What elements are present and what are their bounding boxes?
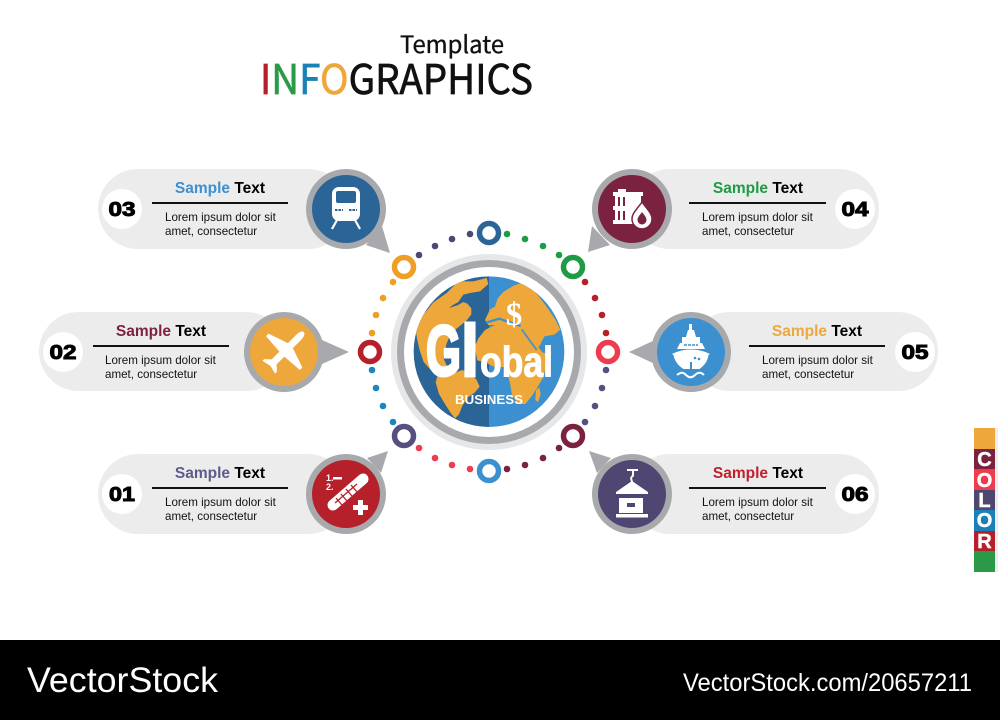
body text 03: Lorem ipsum dolor sit: [165, 211, 277, 224]
body text 06: Lorem ipsum dolor sit: [702, 496, 814, 509]
wordmark: Global: obal: [480, 338, 553, 386]
footer url: VectorStock.com/20657211: [683, 669, 972, 697]
strip letters: R: [977, 531, 992, 553]
wordmark: Global: l: [462, 312, 478, 392]
heading 01: Sample Text: [175, 465, 265, 482]
footer brand: VectorStock: [27, 661, 219, 700]
footer bar: [0, 640, 1000, 720]
body text 05: Lorem ipsum dolor sit: [762, 354, 874, 367]
body text 02: amet, consectetur: [105, 368, 197, 381]
icon: airplane: [252, 315, 321, 384]
orbit rings: [360, 224, 618, 480]
number 04: [835, 189, 875, 229]
strip letters: C: [977, 449, 992, 471]
number 05: [895, 332, 935, 372]
icon: train: [332, 187, 360, 229]
panel 05: [629, 312, 938, 392]
label: business: BUSINESS: [455, 392, 523, 407]
body text 03: amet, consectetur: [165, 225, 257, 238]
number 05: 05: [902, 341, 928, 364]
icon: ship: [672, 324, 710, 377]
title line: Template: Template: [400, 25, 504, 60]
centre globe emblem: [391, 254, 587, 450]
heading 06: Sample Text: [713, 465, 803, 482]
panel 02: [39, 312, 349, 392]
number 03: 03: [108, 198, 136, 221]
icon: thermometer: [326, 473, 368, 515]
dollar sign: $: [506, 297, 522, 333]
heading 04: Sample Text: [713, 180, 803, 197]
body text 01: Lorem ipsum dolor sit: [165, 496, 277, 509]
wordmark: Global: [426, 312, 553, 392]
icon: thermometer: 2.: [326, 482, 334, 492]
body text 01: amet, consectetur: [165, 510, 257, 523]
colour swatch strip: [974, 428, 998, 572]
orbit dots: [369, 231, 609, 472]
wordmark: Global: G: [426, 312, 461, 392]
number 04: 04: [842, 198, 869, 221]
heading 05: Sample Text: [772, 323, 862, 340]
strip letters: O: [977, 510, 992, 532]
heading 02: Sample Text: [116, 323, 206, 340]
strip letters: O: [977, 470, 992, 492]
body text 04: Lorem ipsum dolor sit: [702, 211, 814, 224]
body text 06: amet, consectetur: [702, 510, 794, 523]
globe: [410, 273, 569, 430]
number 01: 01: [109, 483, 135, 506]
strip letters: [977, 449, 992, 553]
number 02: 02: [50, 341, 76, 364]
body text 04: amet, consectetur: [702, 225, 794, 238]
title: [260, 25, 533, 106]
title line: INFOGRAPHICS: INFOGRAPHICS: [260, 46, 533, 106]
number 02: [43, 332, 83, 372]
number 06: [835, 474, 875, 514]
icon: oil barrel and drop: [613, 189, 652, 229]
panel 03: [98, 169, 390, 253]
panel 06: [589, 451, 879, 534]
icon: thermometer: 1.: [326, 473, 334, 483]
outer rings: [391, 254, 587, 450]
number 06: 06: [842, 483, 868, 506]
number 01: [102, 474, 142, 514]
body text 02: Lorem ipsum dolor sit: [105, 354, 217, 367]
icon: mill house: [616, 469, 648, 518]
heading 03: Sample Text: [175, 180, 265, 197]
number 03: [102, 189, 142, 229]
panel 01: [98, 451, 388, 534]
panel 04: [588, 169, 879, 252]
body text 05: amet, consectetur: [762, 368, 854, 381]
strip letters: L: [978, 490, 991, 512]
